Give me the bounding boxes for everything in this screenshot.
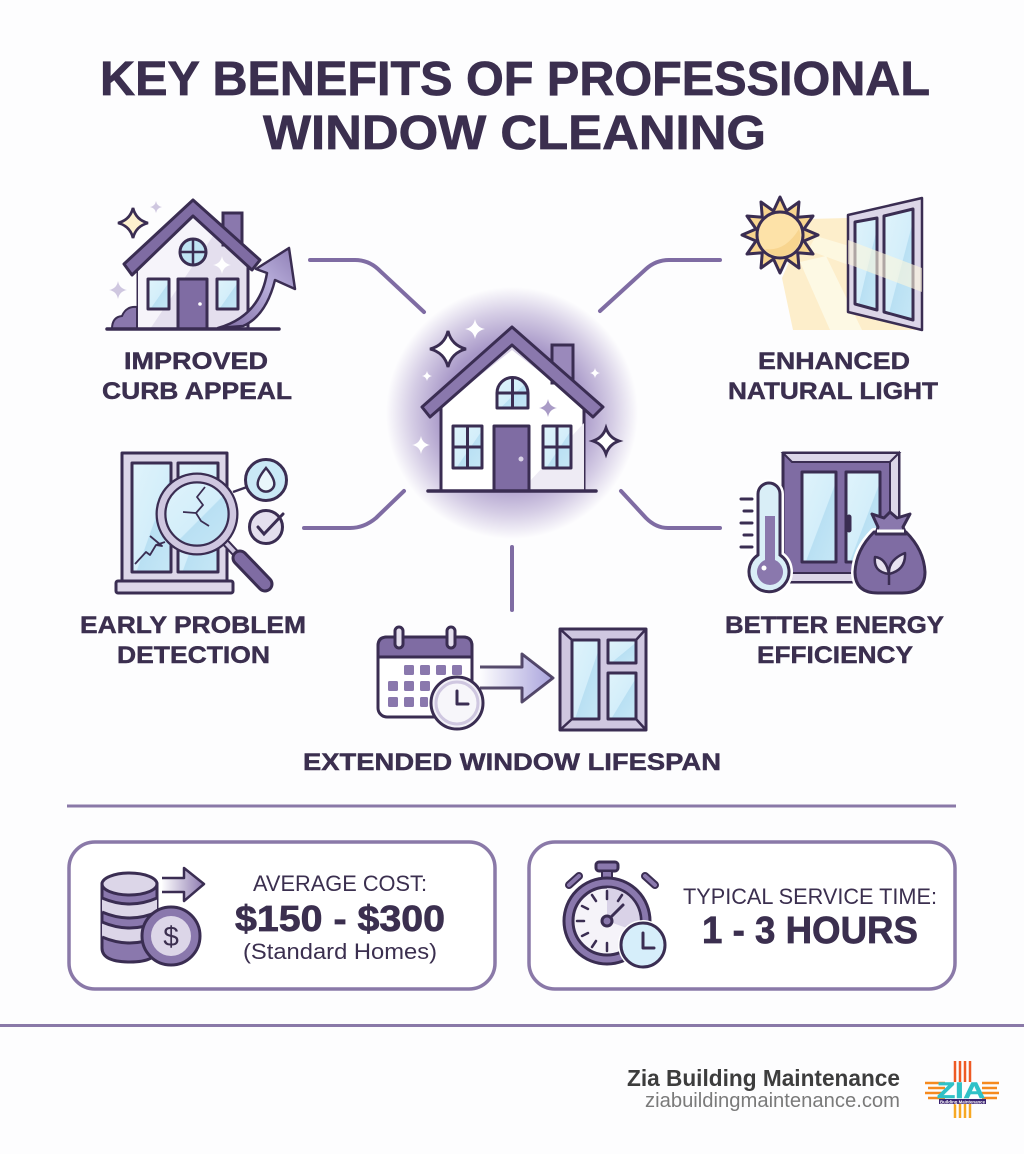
door xyxy=(494,426,529,491)
house body xyxy=(441,345,584,491)
logo: ZIA xyxy=(937,1078,985,1103)
label: IMPROVED xyxy=(124,348,268,375)
icon: cracked window and magnifier xyxy=(116,453,286,593)
connector: window lifespan to centre xyxy=(510,547,514,610)
service time text xyxy=(683,884,937,952)
title xyxy=(100,53,930,160)
icon: stopwatch xyxy=(564,862,668,970)
footer brand xyxy=(627,1061,999,1118)
panel: enhanced natural light xyxy=(728,197,938,405)
label: ENHANCED xyxy=(758,348,910,375)
roof xyxy=(422,327,603,417)
title: KEY BENEFITS OF PROFESSIONAL xyxy=(100,53,930,106)
website: ziabuildingmaintenance.com xyxy=(645,1090,900,1112)
panel: early problem detection xyxy=(80,453,306,669)
label: EARLY PROBLEM xyxy=(80,612,306,639)
panel: improved curb appeal xyxy=(102,200,295,405)
glow xyxy=(386,287,638,539)
label: EXTENDED WINDOW LIFESPAN xyxy=(303,749,721,776)
right window xyxy=(543,426,571,468)
panel: better energy efficiency xyxy=(725,453,944,669)
label: DETECTION xyxy=(117,642,270,669)
panel: average cost xyxy=(69,842,495,989)
icon: coin stack with dollar xyxy=(102,868,204,965)
service time text: 1 - 3 HOURS xyxy=(702,910,918,952)
label xyxy=(728,348,938,405)
label: NATURAL LIGHT xyxy=(728,378,938,405)
label xyxy=(80,612,306,669)
label: BETTER ENERGY xyxy=(725,612,944,639)
connector: natural light to centre xyxy=(600,260,720,311)
connector: problem detection to centre xyxy=(304,491,404,528)
cost text: $150 - $300 xyxy=(235,898,445,939)
icon: coin stack with dollar: $ xyxy=(163,921,179,952)
label: CURB APPEAL xyxy=(102,378,292,405)
label xyxy=(102,348,292,405)
cost text xyxy=(235,871,445,964)
sparkles xyxy=(430,331,466,367)
arched window xyxy=(497,377,528,408)
left window xyxy=(453,426,482,468)
icon: sun and window xyxy=(742,197,922,330)
connector: energy efficiency to centre xyxy=(621,491,720,528)
label: EFFICIENCY xyxy=(757,642,913,669)
cost text: (Standard Homes) xyxy=(243,939,437,964)
chimney xyxy=(552,345,573,383)
icon: window, thermometer, money bag xyxy=(741,453,925,593)
company name: Zia Building Maintenance xyxy=(627,1065,900,1091)
cost text: AVERAGE COST: xyxy=(253,871,427,896)
logo: Building Maintenance xyxy=(940,1100,985,1104)
central house icon xyxy=(386,287,638,539)
icon: calendar, clock, arrow, window xyxy=(378,627,646,730)
panel: typical service time xyxy=(529,842,955,989)
connector: curb appeal to centre xyxy=(310,260,424,312)
label xyxy=(725,612,944,669)
icon: house with rising arrow xyxy=(107,200,295,329)
title: WINDOW CLEANING xyxy=(263,107,766,160)
service time text: TYPICAL SERVICE TIME: xyxy=(683,884,937,909)
panel: extended window lifespan xyxy=(303,627,721,776)
ground xyxy=(428,489,596,493)
logo xyxy=(925,1061,999,1118)
